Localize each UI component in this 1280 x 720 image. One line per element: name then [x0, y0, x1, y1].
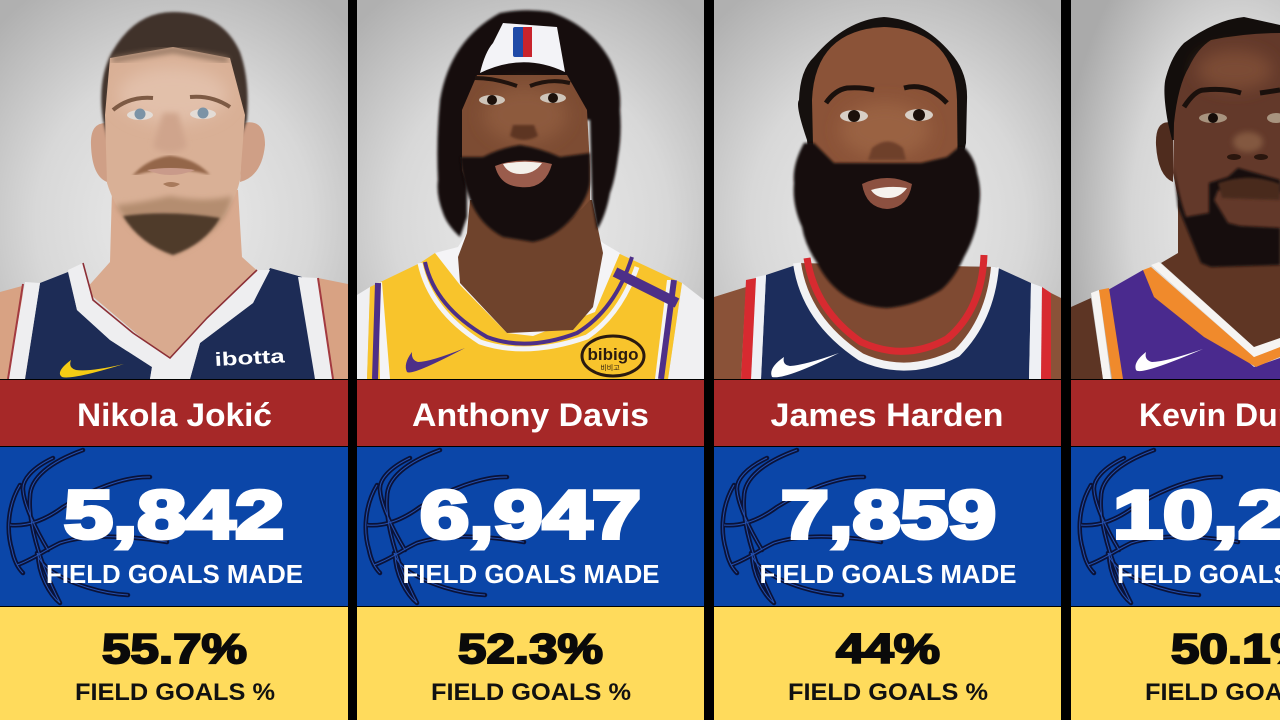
name bar: James Harden: James Harden	[770, 397, 1004, 433]
name bar: Nikola Jokić	[0, 380, 348, 446]
panel: James Harden	[714, 0, 1061, 720]
stat panel: field goal percentage: FIELD GOALS %	[75, 679, 275, 706]
panel: Anthony Davis	[357, 0, 704, 720]
stat panel: field goals made: 5,842	[64, 477, 284, 553]
headband	[480, 23, 565, 73]
stat panel: field goals made	[714, 447, 1061, 606]
icon: basketball	[366, 450, 524, 603]
icon: basketball	[1080, 450, 1238, 603]
stat panel: field goal percentage	[357, 607, 704, 720]
stat panel: field goals made: FIELD GOALS MADE	[760, 559, 1016, 589]
stat panel: field goal percentage: FIELD GOALS %	[788, 679, 988, 706]
stat panel: field goals made: 7,859	[781, 477, 996, 553]
stat panel: field goals made	[357, 447, 704, 606]
logo: purple swoosh	[406, 348, 465, 372]
name bar: Nikola Jokić: Nikola Jokić	[77, 397, 272, 433]
name bar: Anthony Davis	[357, 380, 704, 446]
stat panel: field goals made: FIELD GOALS MADE	[46, 559, 303, 589]
panel: Kevin Durant	[1071, 0, 1280, 720]
portrait: Nikola Jokić	[0, 0, 348, 379]
ears	[91, 123, 107, 182]
portrait: Kevin Durant	[1071, 0, 1280, 379]
stat panel: field goals made	[1071, 447, 1280, 606]
stat panel: field goal percentage: FIELD GOALS %	[431, 679, 631, 706]
sponsor: bibigo	[582, 336, 644, 376]
stat panel: field goal percentage: 52.3%	[458, 625, 603, 672]
stat panel: field goals made: FIELD GOALS MADE	[402, 559, 660, 589]
stat panel: field goal percentage	[1071, 607, 1280, 720]
portrait: James Harden	[714, 0, 1061, 379]
sponsor: bibigo: bibigo	[588, 345, 638, 364]
stat panel: field goal percentage: 44%	[836, 625, 940, 672]
stat panel: field goals made	[0, 447, 348, 606]
logo: white swoosh	[771, 353, 839, 377]
icon: basketball	[723, 450, 881, 603]
name bar: Kevin Durant	[1071, 380, 1280, 446]
panel: Nikola Jokić	[0, 0, 348, 720]
stat panel: field goal percentage: 55.7%	[102, 625, 247, 672]
stat panel: field goal percentage	[714, 607, 1061, 720]
icon: basketball	[9, 450, 167, 603]
stat panel: field goals made: 6,947	[420, 477, 641, 553]
stat panel: field goal percentage	[0, 607, 348, 720]
sponsor: ibotta: ibotta	[214, 346, 286, 371]
portrait: Anthony Davis	[357, 0, 704, 379]
stat panel: field goals made: 10,2	[1113, 477, 1280, 553]
name bar: Anthony Davis: Anthony Davis	[412, 397, 649, 433]
logo: white swoosh	[1135, 349, 1203, 371]
name bar: James Harden	[714, 380, 1061, 446]
logo: yellow swoosh	[60, 360, 124, 377]
sponsor: bibigo: 비비고	[600, 363, 620, 372]
